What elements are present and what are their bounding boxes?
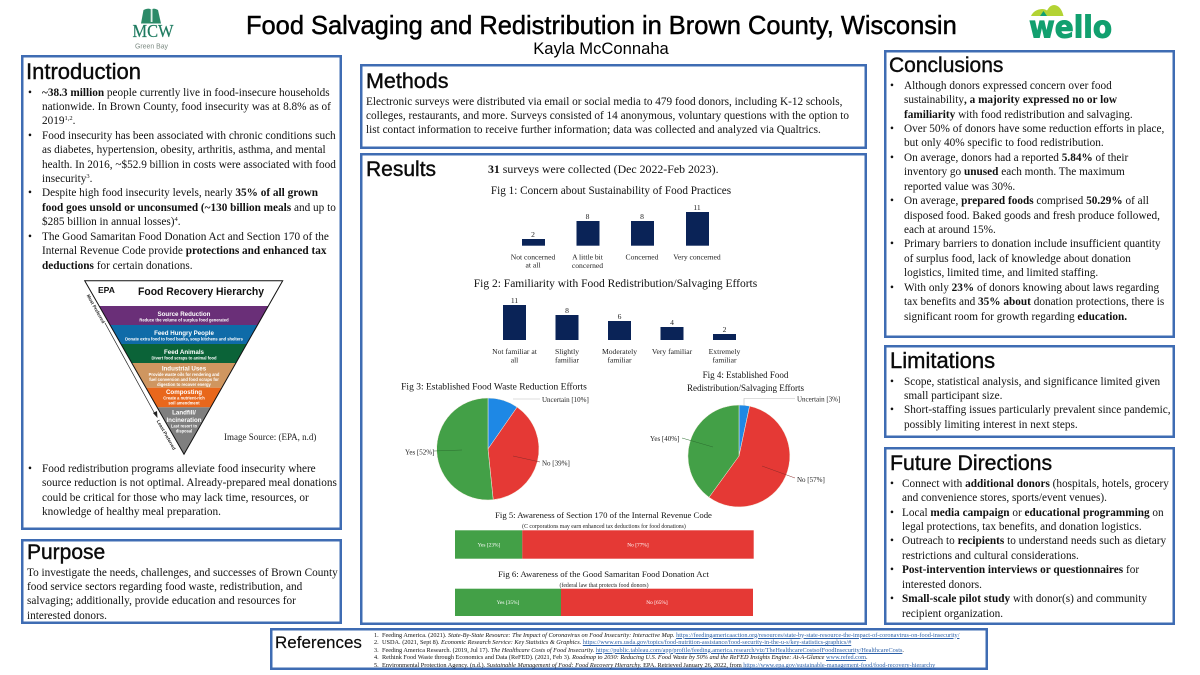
text: conclusions bullets: On average, donors had a reported 5.84% of their: [904, 152, 1128, 164]
chart: fig 4 redistribution pie: Fig 4: Established Food: [703, 370, 789, 380]
chart: food recovery hierarchy: Divert food scraps to animal food: [151, 355, 217, 360]
chart: fig 1 concern bars: Fig 1: Concern about Sustainability of Food Practices: [491, 185, 731, 197]
logo: MCW Green Bay: [132, 8, 174, 50]
chart: fig 4 redistribution pie: Uncertain [3%]: [797, 396, 840, 404]
panel: conclusions: •: [890, 238, 894, 250]
chart: food recovery hierarchy: Reduce the volume of surplus food generated: [139, 317, 229, 322]
text: limitations bullets: possibly limiting interest in next steps.: [904, 419, 1078, 431]
text: introduction bullets: food goes unsold or unconsumed (~130 billion meals and up to: [42, 202, 336, 214]
text: introduction bullets: The Good Samaritan Food Donation Act and Section 170 of the: [42, 231, 329, 243]
text: purpose: salvaging; additionally, provide education and resources for: [27, 595, 296, 607]
panel: conclusions: •: [890, 152, 894, 164]
chart: food recovery hierarchy: Feed Animals: [164, 349, 205, 356]
logo: MCW Green Bay: Green Bay: [135, 42, 168, 50]
text: conclusions bullets: inventory go unused each month. The maximum: [904, 166, 1125, 178]
panel: references: 3.: [374, 646, 379, 654]
chart: food recovery hierarchy: Provide waste oils for rendering and: [149, 372, 220, 377]
panel: future directions: •: [890, 478, 894, 490]
chart: fig 2 familiarity bars: familiar: [607, 356, 632, 364]
text: introduction bullets: [28, 86, 336, 272]
chart: fig 2 familiarity bars: 8: [565, 306, 569, 315]
chart: fig 4 redistribution pie: No [57%]: [797, 476, 825, 484]
chart: food recovery hierarchy: Create a nutrient-rich: [163, 396, 205, 400]
text: redistribution bullet: Food redistribution programs alleviate food insecurity where: [42, 463, 316, 475]
text: future directions bullets: legal protections, tax benefits, and donation logistics.: [902, 521, 1142, 533]
chart: food recovery hierarchy: Food Recovery Hierarchy: [138, 286, 264, 298]
chart: fig 2 familiarity bars: Very familiar: [652, 347, 693, 356]
arrow: most to least preferred: Least Preferred: [156, 419, 177, 451]
panel: limitations: [884, 345, 1175, 438]
text: introduction bullets: health. In 2016, ~$52.9 billion in costs were associated with food: [42, 159, 336, 171]
text: introduction bullets: Internal Revenue Code provide protections and enhanced tax: [42, 245, 326, 257]
chart: food recovery hierarchy: Feed Hungry People: [154, 330, 214, 337]
chart: fig 3 waste reduction pie: [401, 382, 589, 500]
panel: introduction: [21, 55, 342, 530]
panel: conclusions: •: [890, 282, 894, 294]
text: survey count: 31 surveys were collected (Dec 2022-Feb 2023).: [488, 162, 719, 176]
text: methods: list contact information to receive further information; data was collected and analyzed via Qualtrics.: [366, 124, 821, 136]
chart: fig 6 good samaritan awareness: [455, 569, 753, 616]
text: introduction bullets: Despite high food insecurity levels, nearly 35% of all grown: [42, 187, 318, 199]
text: references list: [374, 632, 960, 669]
chart: fig 1 concern bars: 8: [586, 212, 590, 221]
chart: fig 6 good samaritan awareness: (federal law that protects food donors): [559, 582, 649, 589]
panel: conclusions: •: [890, 123, 894, 135]
text: future directions bullets: Outreach to recipients to understand needs such as dietary: [902, 535, 1166, 547]
chart: food recovery hierarchy: Incineration: [166, 417, 202, 424]
text: conclusions bullets: of surplus food, lack of knowledge about donation: [904, 253, 1131, 265]
chart: fig 1 concern bars: Concerned: [626, 252, 659, 262]
text: introduction bullets: 20191,2.: [42, 115, 75, 127]
heading: future directions: Future Directions: [890, 451, 1052, 475]
chart: food recovery hierarchy: [84, 280, 316, 456]
text: methods: colleges, restaurants, and more. Surveys consisted of 14 anonymous, voluntary questions with the option to: [366, 110, 849, 122]
text: references list: Feeding America. (2021). State-By-State Resource: The Impact of Coronavirus on Food Insecurity: Interactive Map. https://feedingamericaaction.org/resources/state-by-state-resource-the-impact-of-coronavirus-on-food-insecurity/: [382, 632, 959, 638]
text: introduction bullets: nationwide. In Brown County, food insecurity was at 8.8% as of: [42, 101, 331, 113]
text: purpose: [27, 566, 338, 622]
panel: references: 5.: [374, 662, 379, 668]
chart: food recovery hierarchy: Last resort to: [171, 424, 198, 428]
panel: conclusions: [884, 50, 1175, 338]
chart: fig 6 good samaritan awareness: Fig 6: Awareness of the Good Samaritan Food Donation Act: [498, 569, 710, 579]
chart: fig 2 familiarity bars: familiar: [712, 356, 737, 364]
text: conclusions bullets: significant room for growth regarding education.: [904, 311, 1127, 323]
chart: fig 2 familiarity bars: 6: [618, 312, 622, 321]
chart: food recovery hierarchy: Industrial Uses: [162, 366, 207, 373]
panel: purpose: [21, 539, 342, 624]
heading: limitations: Limitations: [890, 348, 995, 373]
text: introduction bullets: as diabetes, hypertension, obesity, arthritis, asthma, and mental: [42, 144, 326, 156]
chart: fig 1 concern bars: 11: [693, 203, 701, 212]
chart: fig 2 familiarity bars: 11: [511, 296, 518, 305]
figures: results charts: [401, 162, 840, 616]
panel: limitations: •: [890, 404, 894, 416]
text: future directions bullets: restrictions and cultural considerations.: [902, 550, 1079, 562]
logo: Wello: wello: [1029, 10, 1112, 46]
text: conclusions bullets: Primary barriers to donation include insufficient quantity: [904, 238, 1161, 250]
chart: fig 1 concern bars: Very concerned: [673, 252, 721, 262]
chart: food recovery hierarchy: Source Reduction: [158, 311, 211, 318]
text: conclusions bullets: Although donors expressed concern over food: [904, 80, 1112, 92]
chart: food recovery hierarchy: digestion to recover energy: [157, 382, 212, 387]
chart: fig 4 redistribution pie: [650, 370, 840, 507]
chart: fig 2 familiarity bars: Not familiar at: [492, 347, 538, 356]
chart: fig 5 section 170 awareness: Yes [23%]: [478, 542, 501, 548]
chart: fig 6 good samaritan awareness: No [65%]: [646, 600, 668, 606]
text: future directions bullets: Local media campaign or educational programming on: [902, 507, 1164, 519]
chart: fig 1 concern bars: at all: [526, 260, 540, 270]
chart: fig 3 waste reduction pie: Uncertain [10%]: [542, 396, 589, 404]
text: limitations bullets: small participant size.: [904, 390, 1002, 402]
text: redistribution bullet: source reduction is not optimal. Already-prepared meal donations: [42, 477, 337, 489]
chart: fig 5 section 170 awareness: (C corporations may earn enhanced tax deductions for food donations): [522, 523, 686, 530]
text: conclusions bullets: With only 23% of donors knowing about laws regarding: [904, 282, 1159, 294]
chart: food recovery hierarchy: soil amendment: [168, 400, 200, 406]
heading: purpose: Purpose: [27, 541, 105, 564]
panel: references: [270, 628, 988, 670]
text: purpose: interested donors.: [27, 610, 107, 622]
text: redistribution bullet: could be critical for those who may lack time, resources, or: [42, 492, 309, 504]
text: conclusions bullets: disposed food. Baked goods and fresh produce followed,: [904, 210, 1160, 222]
chart: fig 1 concern bars: 2: [531, 230, 535, 239]
heading: results: Results: [366, 158, 436, 181]
chart: fig 5 section 170 awareness: No [77%]: [627, 542, 649, 548]
chart: food recovery hierarchy: Donate extra food to food banks, soup kitchens and shelters: [125, 336, 244, 342]
heading: methods: Methods: [366, 69, 448, 93]
text: future directions bullets: Post-intervention interviews or questionnaires for: [902, 564, 1139, 576]
text: methods: [366, 96, 849, 136]
text: conclusions bullets: reported value was 30%.: [904, 181, 1015, 193]
text: conclusions bullets: tax benefits and 35% about donation protections, there is: [904, 296, 1164, 308]
text: future directions bullets: Small-scale pilot study with donor(s) and community: [902, 593, 1147, 605]
text: limitations bullets: Short-staffing issues particularly prevalent since pandemic,: [904, 404, 1171, 416]
panel: future directions: [884, 447, 1175, 625]
panel: methods: [360, 64, 867, 149]
text: future directions bullets: recipient organization.: [902, 608, 1003, 620]
chart: fig 2 familiarity bars: 2: [723, 325, 727, 334]
arrow: most to least preferred: Most Preferred: [86, 294, 106, 324]
icon: open book: [141, 9, 161, 24]
panel: conclusions: •: [890, 80, 894, 92]
chart: fig 3 waste reduction pie: No [39%]: [542, 460, 570, 468]
text: conclusions bullets: On average, prepared foods comprised 50.29% of all: [904, 195, 1149, 207]
chart: fig 2 familiarity bars: Moderately: [602, 347, 637, 356]
image source caption: Image Source: (EPA, n.d): [224, 432, 316, 442]
chart: fig 2 familiarity bars: all: [511, 356, 518, 364]
text: purpose: To investigate the needs, challenges, and successes of Brown County: [27, 566, 338, 578]
text: conclusions bullets: but only 40% specific to food redistribution.: [904, 137, 1104, 149]
chart: food recovery hierarchy: disposal: [176, 428, 192, 434]
panel: references: 1.: [374, 632, 379, 638]
chart: fig 4 redistribution pie: Redistribution/Salvaging Efforts: [687, 383, 805, 393]
chart: fig 4 redistribution pie: Yes [40%]: [650, 435, 679, 443]
heading: introduction: Introduction: [26, 59, 141, 84]
panel: introduction: •: [28, 187, 32, 199]
panel: references: 2.: [374, 639, 379, 646]
panel: conclusions: •: [890, 195, 894, 207]
text: conclusions bullets: Over 50% of donors have some reduction efforts in place,: [904, 123, 1164, 135]
panel: limitations: •: [890, 376, 894, 388]
chart: food recovery hierarchy: Composting: [166, 389, 202, 396]
chart: fig 1 concern bars: 8: [640, 212, 644, 221]
text: references list: Feeding America Research. (2019, Jul 17). The Healthcare Costs of Food Insecurity. https://public.tableau.com/app/profile/feeding.america.research/viz/TheHealthcareCostsofFoodInsecurity/HealthcareCosts.: [382, 646, 904, 654]
panel: future directions: •: [890, 507, 894, 519]
panel: future directions: •: [890, 593, 894, 605]
text: references list: USDA. (2021, Sept 8). Economic Research Service: Key Statistics & Graphics. https://www.ers.usda.gov/topics/food-nutrition-assistance/food-security-in-the-u-s/key-statistics-graphics/#: [382, 639, 851, 646]
text: references list: Rethink Food Waste through Economics and Data (ReFED). (2021, Feb 3). Roadmap to 2030: Reducing U.S. Food Waste by 50% and the ReFED Insights Engine: At-A-Glance www.refed.com.: [382, 654, 868, 661]
panel: results: [360, 153, 867, 625]
chart: fig 5 section 170 awareness: Fig 5: Awareness of Section 170 of the Internal Revenue Code: [495, 510, 712, 520]
chart: fig 3 waste reduction pie: Fig 3: Established Food Waste Reduction Efforts: [401, 382, 587, 392]
text: references list: Environmental Protection Agency. (n.d.). Sustainable Management of Food: Food Recovery Hierarchy. EPA. Retrieved January 26, 2022, from https://www.epa.gov/sustainable-management-food/food-recovery-hierarchy: [382, 662, 935, 668]
chart: fig 6 good samaritan awareness: Yes [35%]: [497, 600, 520, 606]
chart: fig 2 familiarity bars: Fig 2: Familiarity with Food Redistribution/Salvaging Efforts: [474, 278, 758, 290]
text: future directions bullets: and convenience stores, sports/event venues).: [902, 492, 1107, 504]
text: conclusions bullets: each at around 15%.: [904, 224, 996, 236]
chart: fig 3 waste reduction pie: Yes [52%]: [405, 448, 434, 456]
heading: conclusions: Conclusions: [889, 54, 1003, 77]
text: introduction bullets: ~38.3 million people currently live in food-insecure households: [42, 86, 330, 98]
text: limitations bullets: [890, 376, 1171, 431]
chart: fig 2 familiarity bars: familiar: [555, 356, 579, 364]
chart: fig 1 concern bars: Not concerned: [511, 252, 555, 262]
chart: fig 2 familiarity bars: Extremely: [709, 347, 741, 356]
text: introduction bullets: deductions for certain donations.: [42, 260, 193, 272]
panel: references: 4.: [374, 654, 379, 661]
chart: fig 2 familiarity bars: 4: [670, 318, 674, 327]
chart: fig 1 concern bars: A little bit: [572, 252, 604, 262]
arrow: most to least preferred: [86, 294, 177, 451]
text: conclusions bullets: [890, 80, 1164, 323]
chart: fig 2 familiarity bars: [474, 278, 758, 364]
text: introduction bullets: Food insecurity has been associated with chronic conditions such: [42, 130, 336, 142]
text: redistribution bullet: knowledge of healthy meal preparation.: [42, 506, 221, 518]
text: redistribution bullet: [28, 463, 337, 518]
panel: introduction: •: [28, 231, 32, 243]
chart: food recovery hierarchy: fuel conversion and food scraps for: [149, 377, 219, 382]
text: purpose: food service sectors regarding food waste, redistribution, and: [27, 581, 302, 593]
text: methods: Electronic surveys were distributed via email or social media to 479 food donors, including K-12 schools,: [366, 96, 842, 108]
logo: MCW Green Bay: MCW: [132, 21, 174, 41]
text: future directions bullets: interested donors.: [902, 579, 982, 591]
text: introduction bullets: insecurity3.: [42, 173, 92, 185]
text: future directions bullets: [890, 478, 1169, 620]
title: Food Salvaging and Redistribution in Brown County, Wisconsin: [246, 12, 957, 40]
text: conclusions bullets: logistics, limited time, and limited staffing.: [904, 267, 1098, 279]
panel: future directions: •: [890, 564, 894, 576]
text: future directions bullets: Connect with additional donors (hospitals, hotels, grocery: [902, 478, 1169, 490]
text: conclusions bullets: familiarity with food redistribution and salvaging.: [904, 109, 1133, 121]
panel: future directions: •: [890, 535, 894, 547]
panel: introduction: •: [28, 86, 32, 98]
text: limitations bullets: Scope, statistical analysis, and significance limited given: [904, 376, 1160, 388]
panel: introduction: •: [28, 130, 32, 142]
chart: food recovery hierarchy: Landfill/: [172, 410, 196, 416]
author: Kayla McConnaha: [533, 39, 669, 58]
chart: fig 2 familiarity bars: Slightly: [555, 347, 579, 356]
chart: fig 1 concern bars: concerned: [572, 261, 603, 270]
heading: references: References: [275, 633, 362, 652]
chart: fig 1 concern bars: [491, 185, 731, 270]
chart: fig 5 section 170 awareness: [455, 510, 754, 559]
text: introduction bullets: $285 billion in annual losses)4.: [42, 216, 181, 228]
panel: introduction: •: [28, 463, 32, 475]
text: conclusions bullets: sustainability, a majority expressed no or low: [904, 94, 1117, 106]
chart: food recovery hierarchy: EPA: [98, 285, 115, 295]
